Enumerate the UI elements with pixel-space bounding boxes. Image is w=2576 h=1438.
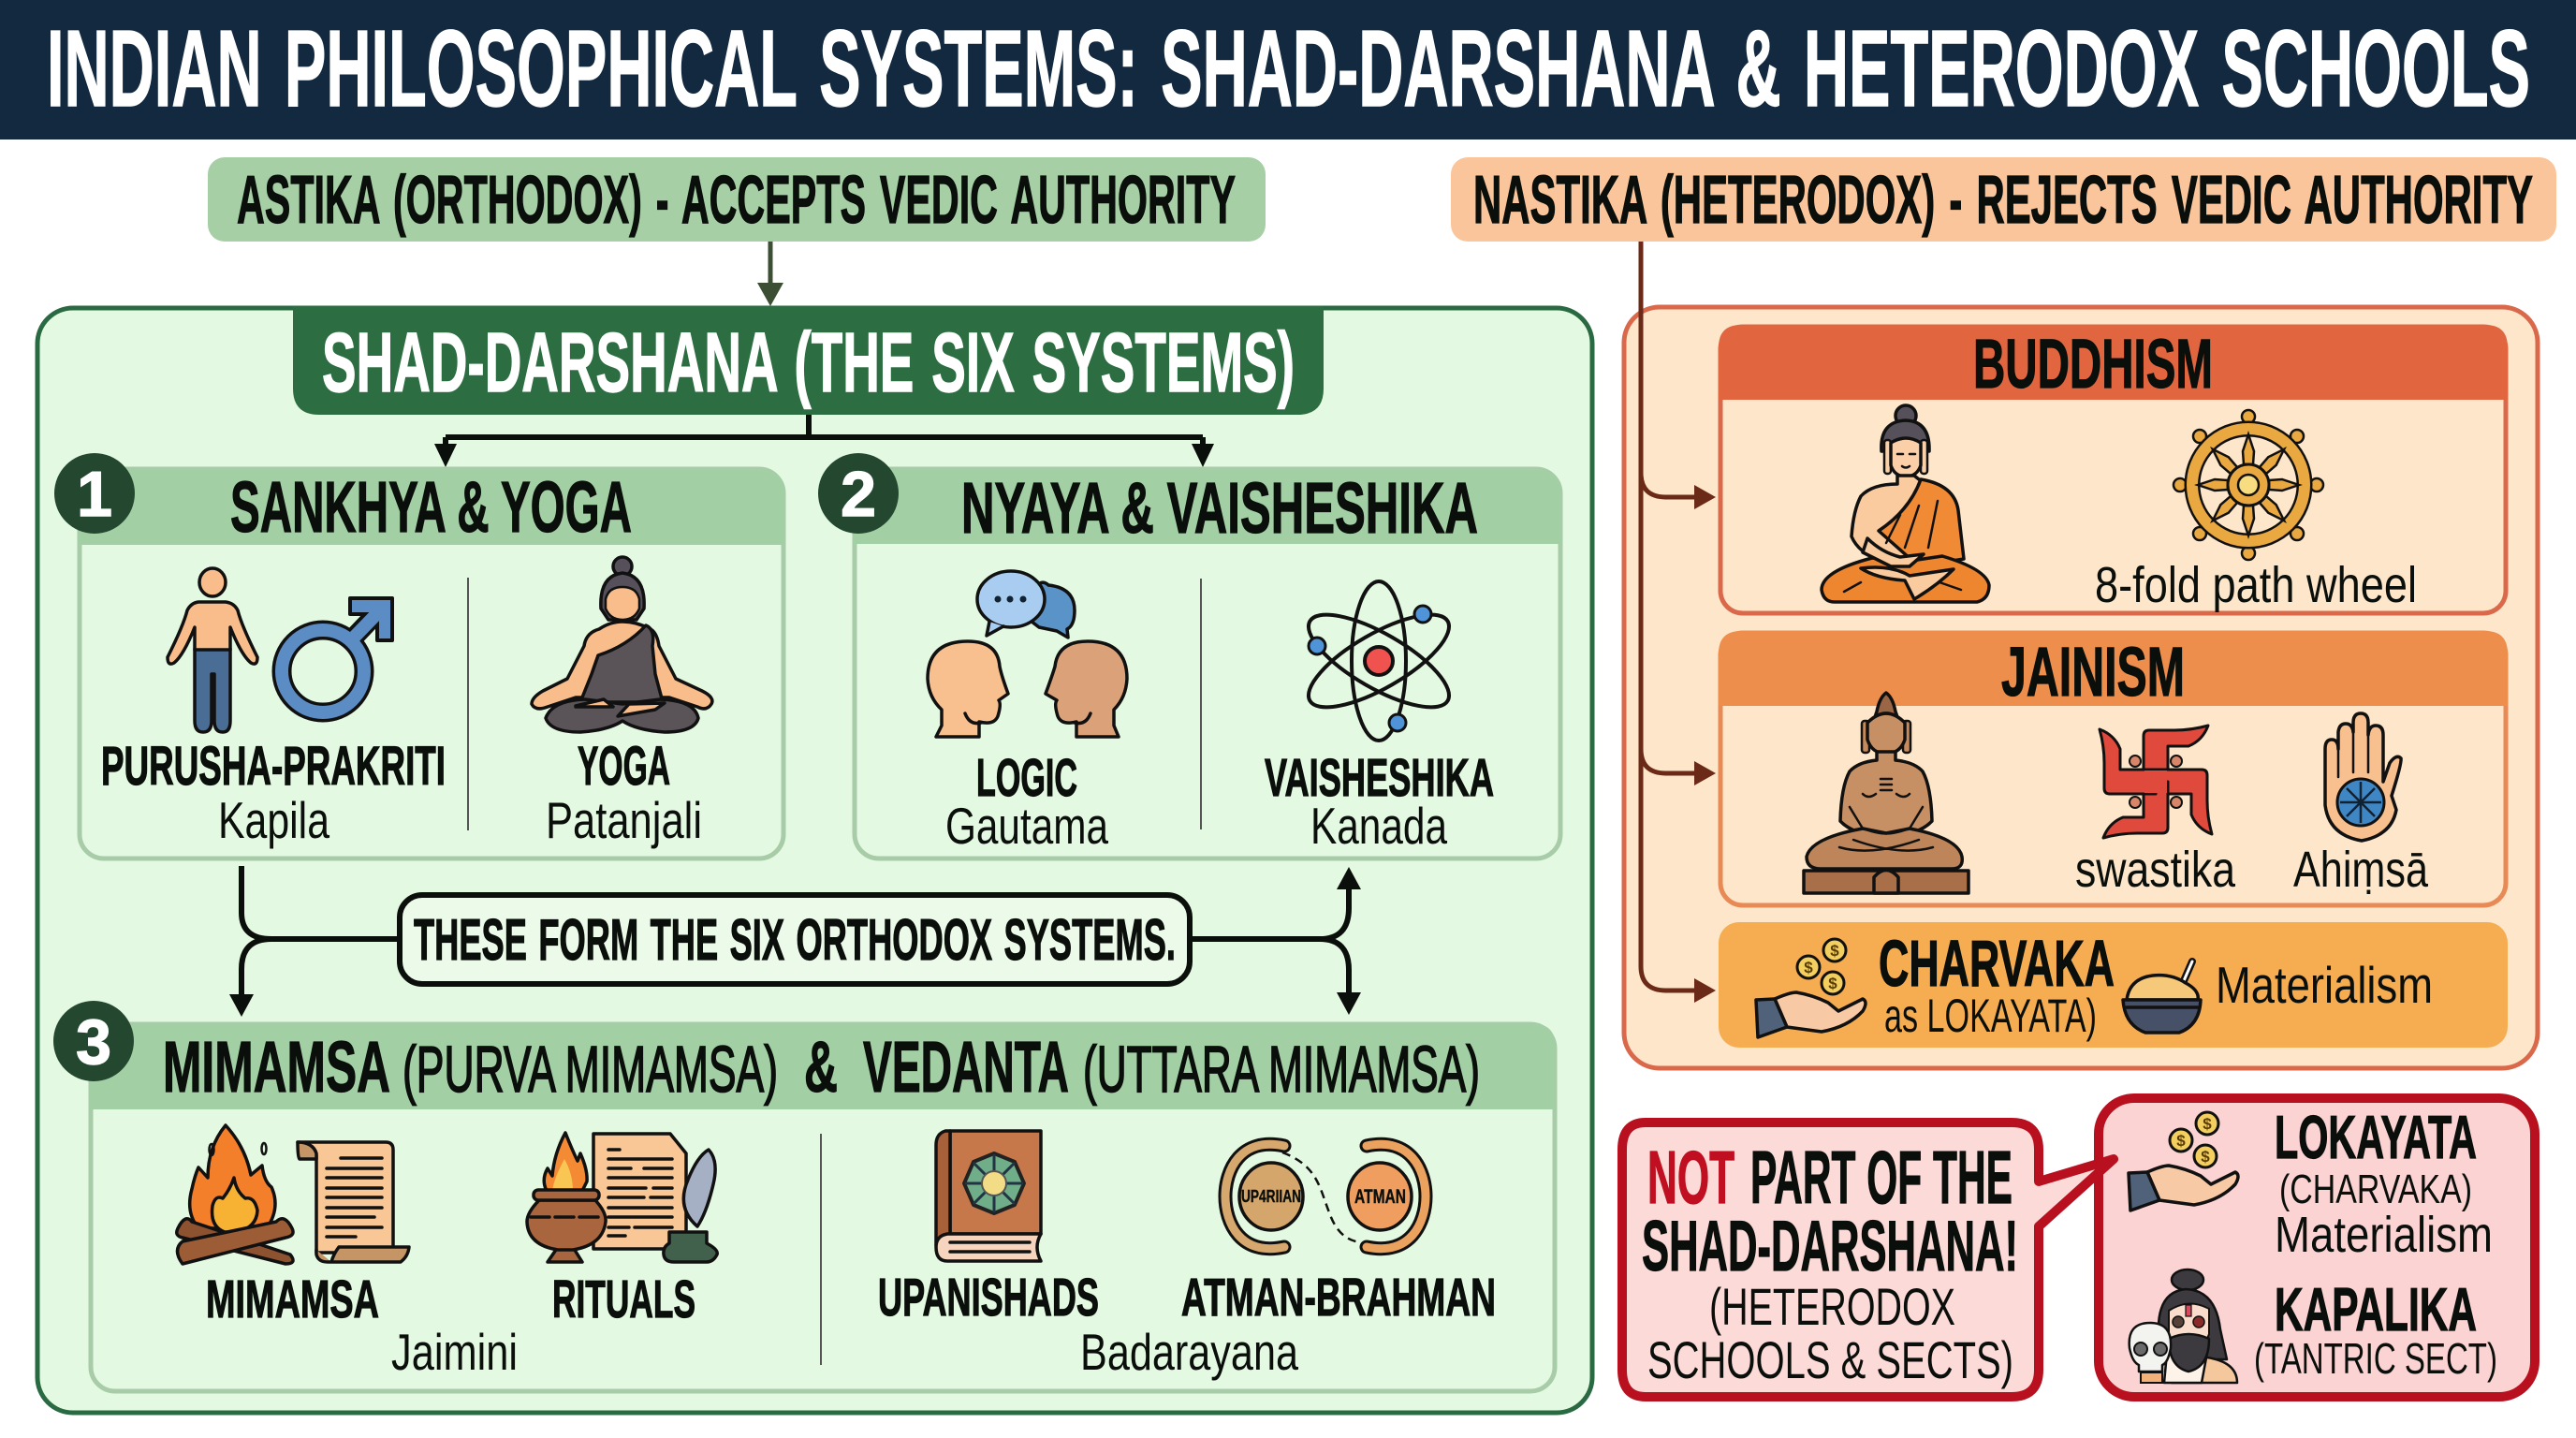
heading: shad-darshana bbox=[293, 306, 1324, 415]
callout: not part of the shad-darshana: SCHOOLS & SECTS) bbox=[1647, 1330, 2013, 1389]
label: atman-brahman: ATMAN-BRAHMAN bbox=[1181, 1268, 1496, 1328]
panel: buddhism bbox=[1719, 325, 2508, 613]
panel heading: VEDANTA bbox=[863, 1027, 1069, 1108]
icon: jain tirthankara bbox=[1804, 693, 1969, 893]
icon: hand with coins: $ bbox=[1804, 959, 1813, 976]
label: ahimsa: Ahiṃsā bbox=[2293, 842, 2429, 898]
number badge 1: 1 bbox=[77, 459, 112, 530]
icon: upanishad book bbox=[936, 1131, 1041, 1261]
icon: atman-brahman: ATMAN bbox=[1354, 1186, 1406, 1208]
icon: ritual pot, paper, quill bbox=[527, 1133, 717, 1262]
label: vaisheshika: Kanada bbox=[1310, 797, 1447, 855]
label: lokayata: (CHARVAKA) bbox=[2279, 1167, 2472, 1212]
icon: hand with coins: $ bbox=[2201, 1148, 2210, 1166]
label: materialism: Materialism bbox=[2216, 956, 2433, 1014]
subtitle: as LOKAYATA) bbox=[1884, 990, 2097, 1042]
astika heading pill bbox=[208, 157, 1266, 242]
label: jaimini: Jaimini bbox=[391, 1323, 518, 1381]
panel heading: SANKHYA & YOGA bbox=[230, 467, 632, 548]
label: kapalika: KAPALIKA bbox=[2275, 1275, 2477, 1343]
arrow: shad-darshana to first two groups bbox=[434, 415, 1214, 467]
panel heading: MIMAMSA bbox=[163, 1027, 390, 1108]
label: badarayana: Badarayana bbox=[1080, 1323, 1298, 1381]
number badge 1 bbox=[54, 453, 135, 534]
icon: hand with coins: $ bbox=[1830, 942, 1839, 960]
label: lokayata: Materialism bbox=[2275, 1207, 2493, 1263]
icon: atman-brahman bbox=[1225, 1144, 1426, 1249]
icon: purusha figure bbox=[168, 568, 257, 732]
panel: nyaya and vaisheshika bbox=[818, 453, 1561, 858]
icon: scroll bbox=[298, 1142, 409, 1262]
icon: swastika bbox=[2100, 726, 2212, 838]
arrow: astika to shad-darshana bbox=[757, 242, 783, 306]
icon: bowl bbox=[2123, 961, 2201, 1033]
icon: sacred fire bbox=[177, 1125, 293, 1264]
label: yoga: YOGA bbox=[578, 736, 670, 797]
label: logic: LOGIC bbox=[976, 748, 1077, 808]
panel: nastika schools bbox=[1624, 242, 2538, 1068]
panel: mimamsa and vedanta bbox=[53, 1001, 1556, 1391]
icon: yoga figure bbox=[532, 557, 712, 732]
callout: not part of the shad-darshana: NOT bbox=[1647, 1136, 1734, 1219]
icon: kapalika with skull bbox=[2130, 1269, 2237, 1383]
icon: hand with coins bbox=[1756, 939, 1866, 1037]
icon: hand with coins: $ bbox=[2176, 1132, 2186, 1150]
callout: not part of the shad-darshana bbox=[1622, 1123, 2114, 1397]
label: logic bbox=[945, 748, 1108, 855]
number badge 2: 2 bbox=[841, 459, 876, 530]
callout: not part of the shad-darshana: (HETERODOX bbox=[1709, 1277, 1955, 1336]
label: kapalika bbox=[2254, 1275, 2497, 1383]
panel: charvaka bbox=[1719, 922, 2508, 1048]
icon: atman-brahman: UP4RIIAN bbox=[1241, 1187, 1301, 1206]
callout: six orthodox systems bbox=[400, 895, 1190, 984]
panel heading bbox=[163, 1027, 1480, 1108]
panel heading: NYAYA & VAISHESHIKA bbox=[961, 468, 1478, 549]
icon: buddha bbox=[1822, 405, 1989, 602]
label: vaisheshika: VAISHESHIKA bbox=[1265, 748, 1494, 808]
label: swastika: swastika bbox=[2075, 842, 2236, 898]
heading: JAINISM bbox=[2001, 633, 2185, 711]
label: 8-fold path wheel: 8-fold path wheel bbox=[2095, 557, 2417, 613]
heading: BUDDHISM bbox=[1973, 325, 2213, 403]
icon: atom bbox=[1296, 581, 1461, 741]
label: yoga bbox=[546, 736, 702, 849]
panel: jainism bbox=[1719, 631, 2508, 905]
heading: CHARVAKA bbox=[1879, 927, 2115, 1000]
astika heading pill: ASTIKA (ORTHODOX) - ACCEPTS VEDIC AUTHORITY bbox=[237, 163, 1236, 238]
number badge 3: 3 bbox=[76, 1006, 111, 1078]
panel heading: (UTTARA MIMAMSA) bbox=[1083, 1033, 1480, 1106]
arrows: nastika branch bbox=[1641, 242, 1716, 1003]
heading: shad-darshana: SHAD-DARSHANA (THE SIX SYSTEMS) bbox=[322, 316, 1295, 410]
label: purusha-prakriti: Kapila bbox=[218, 791, 329, 849]
label: logic: Gautama bbox=[945, 797, 1108, 855]
arrows: connector bracket bbox=[229, 866, 1361, 1017]
title banner bbox=[0, 0, 2576, 139]
label: rituals: RITUALS bbox=[552, 1269, 695, 1329]
callout: not part of the shad-darshana: SHAD-DARSHANA! bbox=[1642, 1207, 2018, 1286]
label: mimamsa: MIMAMSA bbox=[206, 1269, 379, 1329]
icon: two heads bbox=[928, 641, 1127, 737]
panel heading: (PURVA MIMAMSA) bbox=[402, 1033, 778, 1106]
callout: not part of the shad-darshana: PART OF THE bbox=[1750, 1136, 2012, 1219]
panel: sankhya and yoga bbox=[54, 453, 784, 858]
label: lokayata bbox=[2275, 1103, 2493, 1263]
icon: speech bubbles bbox=[977, 571, 1075, 638]
label: vaisheshika bbox=[1265, 748, 1494, 855]
label: upanishads: UPANISHADS bbox=[878, 1268, 1099, 1328]
icon: dharma wheel bbox=[2174, 410, 2323, 560]
label: purusha-prakriti: PURUSHA-PRAKRITI bbox=[101, 736, 446, 797]
icon: hand with coins: $ bbox=[2203, 1115, 2212, 1133]
icon: hand with coins bbox=[2129, 1112, 2238, 1211]
icon: ahimsa hand bbox=[2325, 713, 2401, 841]
label: purusha-prakriti bbox=[101, 736, 446, 849]
panel heading: & bbox=[804, 1027, 838, 1108]
number badge 3 bbox=[53, 1001, 134, 1081]
number badge 2 bbox=[818, 453, 899, 534]
label: yoga: Patanjali bbox=[546, 791, 702, 849]
icon: mars symbol bbox=[282, 598, 392, 712]
callout: six orthodox systems: THESE FORM THE SIX ORTHODOX SYSTEMS. bbox=[414, 908, 1176, 973]
panel: lokayata and kapalika bbox=[2099, 1098, 2535, 1397]
panel: shad-darshana bbox=[37, 306, 1592, 1413]
icon: hand with coins: $ bbox=[1828, 975, 1837, 992]
